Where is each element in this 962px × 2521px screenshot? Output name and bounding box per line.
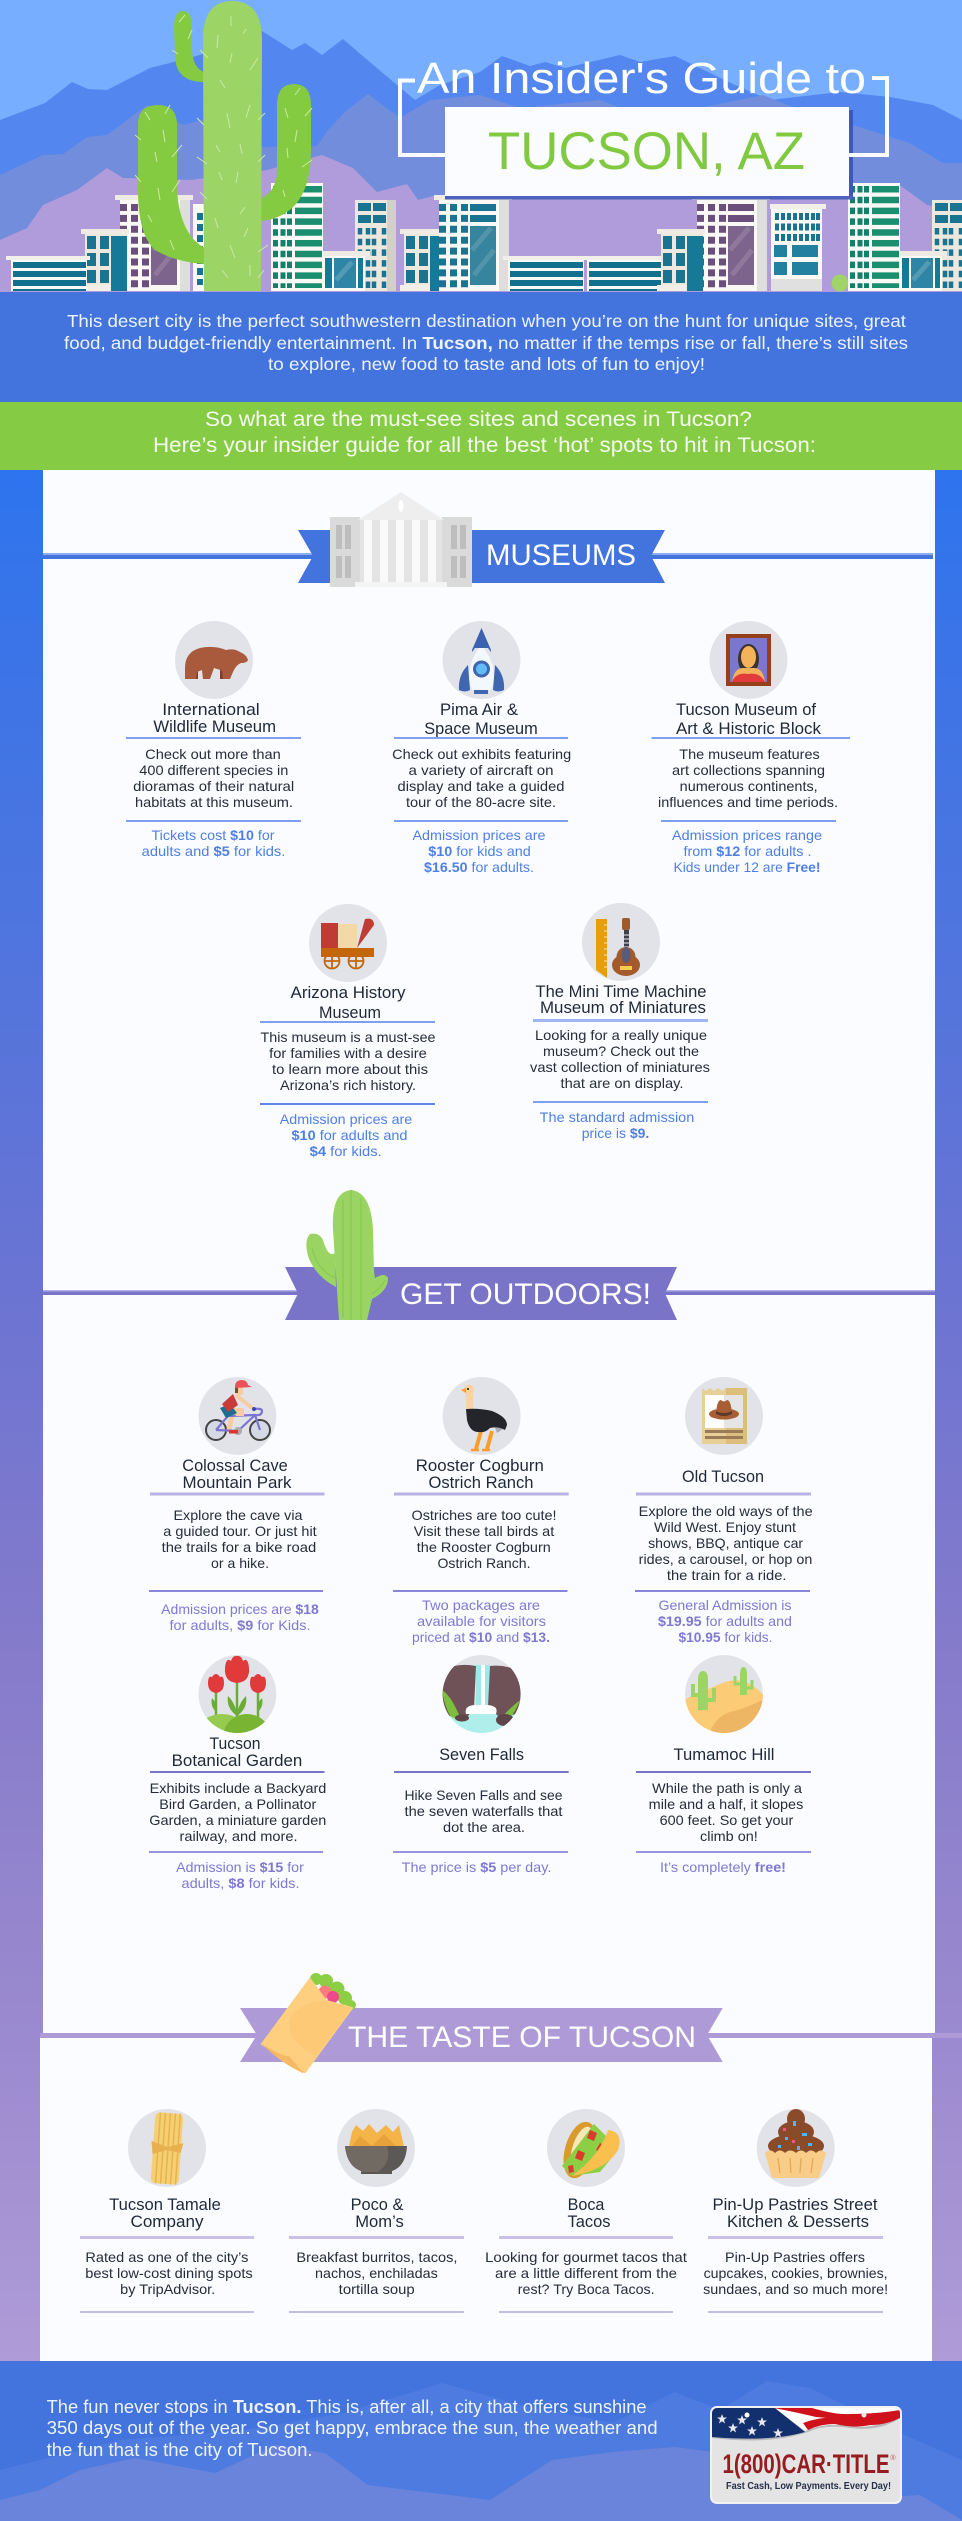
description: rides, a carousel, or hop on [639,1551,812,1567]
description: vast collection of miniatures [530,1059,710,1075]
title: Mom’s [355,2213,404,2231]
price: adults, $8 for kids. [182,1875,300,1891]
description [392,746,571,810]
title: Poco & [351,2196,403,2214]
title [676,701,822,738]
description: or a hike. [211,1555,269,1571]
price: Kids under 12 are Free! [674,859,820,875]
price: price is $9. [582,1125,649,1141]
icon: nachos [337,2109,415,2187]
title bracket [400,78,887,155]
near mountains [0,155,962,292]
price: $19.95 for adults and [658,1613,792,1629]
description: rest? Try Boca Tacos. [518,2281,655,2297]
icon: cupcake [757,2109,835,2187]
title: Art & Historic Block [676,720,822,738]
description: influences and time periods. [658,794,838,810]
description: cupcakes, cookies, brownies, [704,2265,888,2281]
title: Old Tucson [682,1468,764,1486]
description: for families with a desire [269,1045,427,1061]
section heading: get outdoors [43,1190,935,1320]
price: It’s completely free! [660,1859,786,1875]
title [416,1457,544,1492]
description [296,2249,457,2297]
title [568,2196,610,2231]
main content panel [40,470,935,2361]
title: International [162,701,260,719]
card: Tucson Botanical Garden [149,1655,326,1891]
price: Admission is $15 for [176,1859,304,1875]
icon: desert hill [685,1655,763,1733]
price: $10 for adults and [292,1127,408,1143]
title: Arizona History [290,984,406,1002]
card: Rooster Cogburn Ostrich Ranch [393,1377,569,1645]
title: Tucson [210,1735,260,1753]
price [412,1597,550,1645]
green band heading: So what are the must-see sites and scenes in Tucson? [205,408,752,431]
price [540,1109,694,1141]
icon: portrait painting [710,621,788,699]
far mountains [0,31,962,175]
footer text [47,2397,658,2460]
description [133,746,294,810]
price: $10 for kids and [428,843,531,859]
card: Tucson Museum of Art [652,621,850,875]
price: adults and $5 for kids. [142,843,285,859]
price: Two packages are [422,1597,540,1613]
price: Admission prices are $18 [161,1601,319,1617]
description: Bird Garden, a Pollinator [159,1796,317,1812]
description: the Rooster Cogburn [417,1539,551,1555]
section title: MUSEUMS [486,539,636,572]
description: by TripAdvisor. [120,2281,215,2297]
description: best low-cost dining spots [85,2265,253,2281]
title: Botanical Garden [172,1752,302,1770]
green band subheading: Here’s your insider guide for all the best ‘hot’ spots to hit in Tucson: [153,434,816,457]
title: Pima Air & [440,701,518,719]
description [162,1507,317,1571]
title box shadow [445,196,853,200]
description: 600 feet. So get your [660,1812,794,1828]
description: Arizona’s rich history. [280,1077,416,1093]
description: Check out exhibits featuring [392,746,571,762]
description: Garden, a miniature garden [149,1812,326,1828]
description [703,2249,888,2297]
description: Wild West. Enjoy stunt [654,1519,796,1535]
description: The museum features [679,746,820,762]
title: Ostrich Ranch [428,1474,534,1492]
intro text [64,311,908,374]
icon: covered wagon [309,904,387,982]
description: Breakfast burritos, tacos, [296,2249,457,2265]
plate registered mark: ® [890,2454,896,2462]
card: Pin-Up Pastries [703,2109,888,2313]
description: display and take a guided [398,778,564,794]
price: General Admission is [658,1597,792,1613]
description: dot the area. [443,1819,525,1835]
plate tagline: Fast Cash, Low Payments. Every Day! [726,2480,891,2492]
title [172,1735,302,1770]
price: Admission prices are [412,827,546,843]
title: Tacos [568,2213,610,2231]
description: a variety of aircraft on [408,762,554,778]
card: Tumamoc Hill [636,1655,811,1875]
price [412,827,546,875]
title [290,984,406,1022]
title box [445,107,849,196]
description: the trails for a bike road [162,1539,316,1555]
description [85,2249,253,2297]
description: Pin-Up Pastries offers [725,2249,865,2265]
section heading: the taste of tucson [40,1973,962,2073]
title: Tumamoc Hill [674,1746,774,1764]
description: to learn more about this [272,1061,428,1077]
card: Colossal Cave Mountain Park [149,1377,324,1633]
card: International Wildlife Museum [126,621,301,859]
footer text: The fun never stops in Tucson. This is, after all, a city that offers sunshine [47,2397,647,2417]
icon: wanted poster [685,1377,763,1455]
title [424,701,538,738]
narrow building behind cactus [193,204,205,291]
title: Company [130,2213,204,2231]
footer band [0,2361,962,2521]
footer text: 350 days out of the year. So get happy, embrace the sun, the weather and [47,2418,658,2438]
title: Seven Falls [439,1746,524,1764]
description: numerous continents, [680,778,818,794]
middle mountains [0,94,962,240]
section title: GET OUTDOORS! [400,1278,651,1311]
title: Mountain Park [182,1474,292,1492]
title [351,2196,404,2231]
gradient side background [0,470,962,2361]
logo: license plate [710,2406,902,2504]
description: the train for a ride. [667,1567,786,1583]
description: the seven waterfalls that [404,1803,563,1819]
description: Rated as one of the city’s [85,2249,248,2265]
description: shows, BBQ, antique car [648,1535,803,1551]
description [639,1503,813,1583]
description [404,1787,563,1835]
description: This museum is a must-see [260,1029,436,1045]
title: Kitchen & Desserts [727,2213,869,2231]
description [530,1027,710,1091]
description: habitats at this museum. [135,794,293,810]
title: Museum [319,1004,381,1022]
title: Tucson Tamale [109,2196,221,2214]
title [182,1457,292,1492]
title: Colossal Cave [182,1457,288,1475]
card: Old Tucson [635,1377,813,1645]
price [161,1601,319,1633]
icon: ruler and guitar [582,903,660,981]
card: Boca Tacos [485,2109,687,2313]
description [260,1029,436,1093]
title [109,2196,221,2231]
description: Looking for a really unique [535,1027,707,1043]
description: Hike Seven Falls and see [404,1787,563,1803]
title: Space Museum [424,720,538,738]
price: $4 for kids. [310,1143,382,1159]
card: Tucson Tamale Company [80,2109,254,2313]
description: nachos, enchiladas [315,2265,438,2281]
intro text: food, and budget-friendly entertainment. In Tucson, no matter if the temps rise or fall, there’s still sites [64,333,908,353]
title: Rooster Cogburn [416,1457,544,1475]
title [153,701,276,736]
title: Wildlife Museum [153,718,276,736]
description: a guided tour. Or just hit [163,1523,317,1539]
price [176,1859,304,1891]
description: that are on display. [560,1075,684,1091]
description [649,1780,803,1844]
icon: bear [175,621,253,699]
price: for adults, $9 for Kids. [170,1617,311,1633]
title [712,2196,878,2231]
icon: ostrich [443,1377,521,1455]
footer text: the fun that is the city of Tucson. [47,2440,313,2460]
skyline buildings [6,183,962,292]
flag [712,2408,900,2440]
price: The price is $5 per day. [402,1859,551,1875]
description: railway, and more. [180,1828,298,1844]
cactus large [135,1,312,291]
description: museum? Check out the [543,1043,699,1059]
card: Pima Air & Space Museum [392,621,571,875]
description [412,1507,556,1571]
card: Poco & Mom's [289,2109,464,2313]
description: Explore the old ways of the [639,1503,813,1519]
icon: museum building [330,492,472,587]
header scene [0,0,962,292]
description: Visit these tall birds at [414,1523,554,1539]
price [142,827,285,859]
title: Tucson Museum of [676,701,816,719]
description [658,746,838,810]
icon: rocket [442,621,520,699]
description: Ostrich Ranch. [438,1555,530,1571]
title line two: TUCSON, AZ [488,122,805,181]
plate name: 1(800)CAR·TITLE [722,2449,890,2479]
description: tortilla soup [339,2281,415,2297]
price: $10.95 for kids. [678,1629,772,1645]
description: Looking for gourmet tacos that [485,2249,687,2265]
icon: tamale [128,2109,206,2187]
description: are a little different from the [495,2265,677,2281]
price: Admission prices range [672,827,822,843]
description: While the path is only a [652,1780,802,1796]
title [536,983,706,1017]
icon: cactus [306,1190,388,1320]
description: Check out more than [145,746,281,762]
icon: tulips [198,1655,276,1733]
price [658,1597,792,1645]
title: Boca [568,2196,605,2214]
description: Exhibits include a Backyard [150,1780,326,1796]
icon: taco [547,2109,625,2187]
intro band [0,292,962,402]
card: The Mini Time Machine [530,903,710,1141]
description: dioramas of their natural [133,778,294,794]
title: Museum of Miniatures [540,999,706,1017]
title line one: An Insider's Guide to [417,54,866,103]
intro text: to explore, new food to taste and lots of fun to enjoy! [268,354,705,374]
description [485,2249,687,2297]
icon: cyclist [198,1377,276,1455]
description: tour of the 80-acre site. [406,794,556,810]
card: Arizona History Museum [260,904,436,1159]
sky [0,0,962,120]
price: from $12 for adults . [684,843,812,859]
price: The standard admission [540,1109,694,1125]
price: Admission prices are [280,1111,412,1127]
intro text: This desert city is the perfect southwestern destination when you’re on the hunt for unique sites, great [67,311,906,331]
price: $16.50 for adults. [424,859,534,875]
description: sundaes, and so much more! [703,2281,888,2297]
title: The Mini Time Machine [536,983,706,1001]
icon: waterfall [442,1655,521,1733]
description: Ostriches are too cute! [412,1507,556,1523]
price: Tickets cost $10 for [152,827,275,843]
small bush [832,274,848,292]
description: mile and a half, it slopes [649,1796,803,1812]
section title: THE TASTE OF TUCSON [348,2021,696,2054]
card: Seven Falls [393,1655,569,1875]
title: Pin-Up Pastries Street [712,2196,878,2214]
price: available for visitors [417,1613,546,1629]
price: priced at $10 and $13. [412,1629,550,1645]
icon: burrito [262,1973,356,2073]
description: Explore the cave via [174,1507,303,1523]
price [280,1111,412,1159]
description [149,1780,326,1844]
white building right [770,204,826,291]
section heading: museums [43,492,933,587]
description: climb on! [700,1828,758,1844]
price [672,827,822,875]
green band [0,402,962,470]
description: 400 different species in [139,762,288,778]
description: art collections spanning [672,762,825,778]
